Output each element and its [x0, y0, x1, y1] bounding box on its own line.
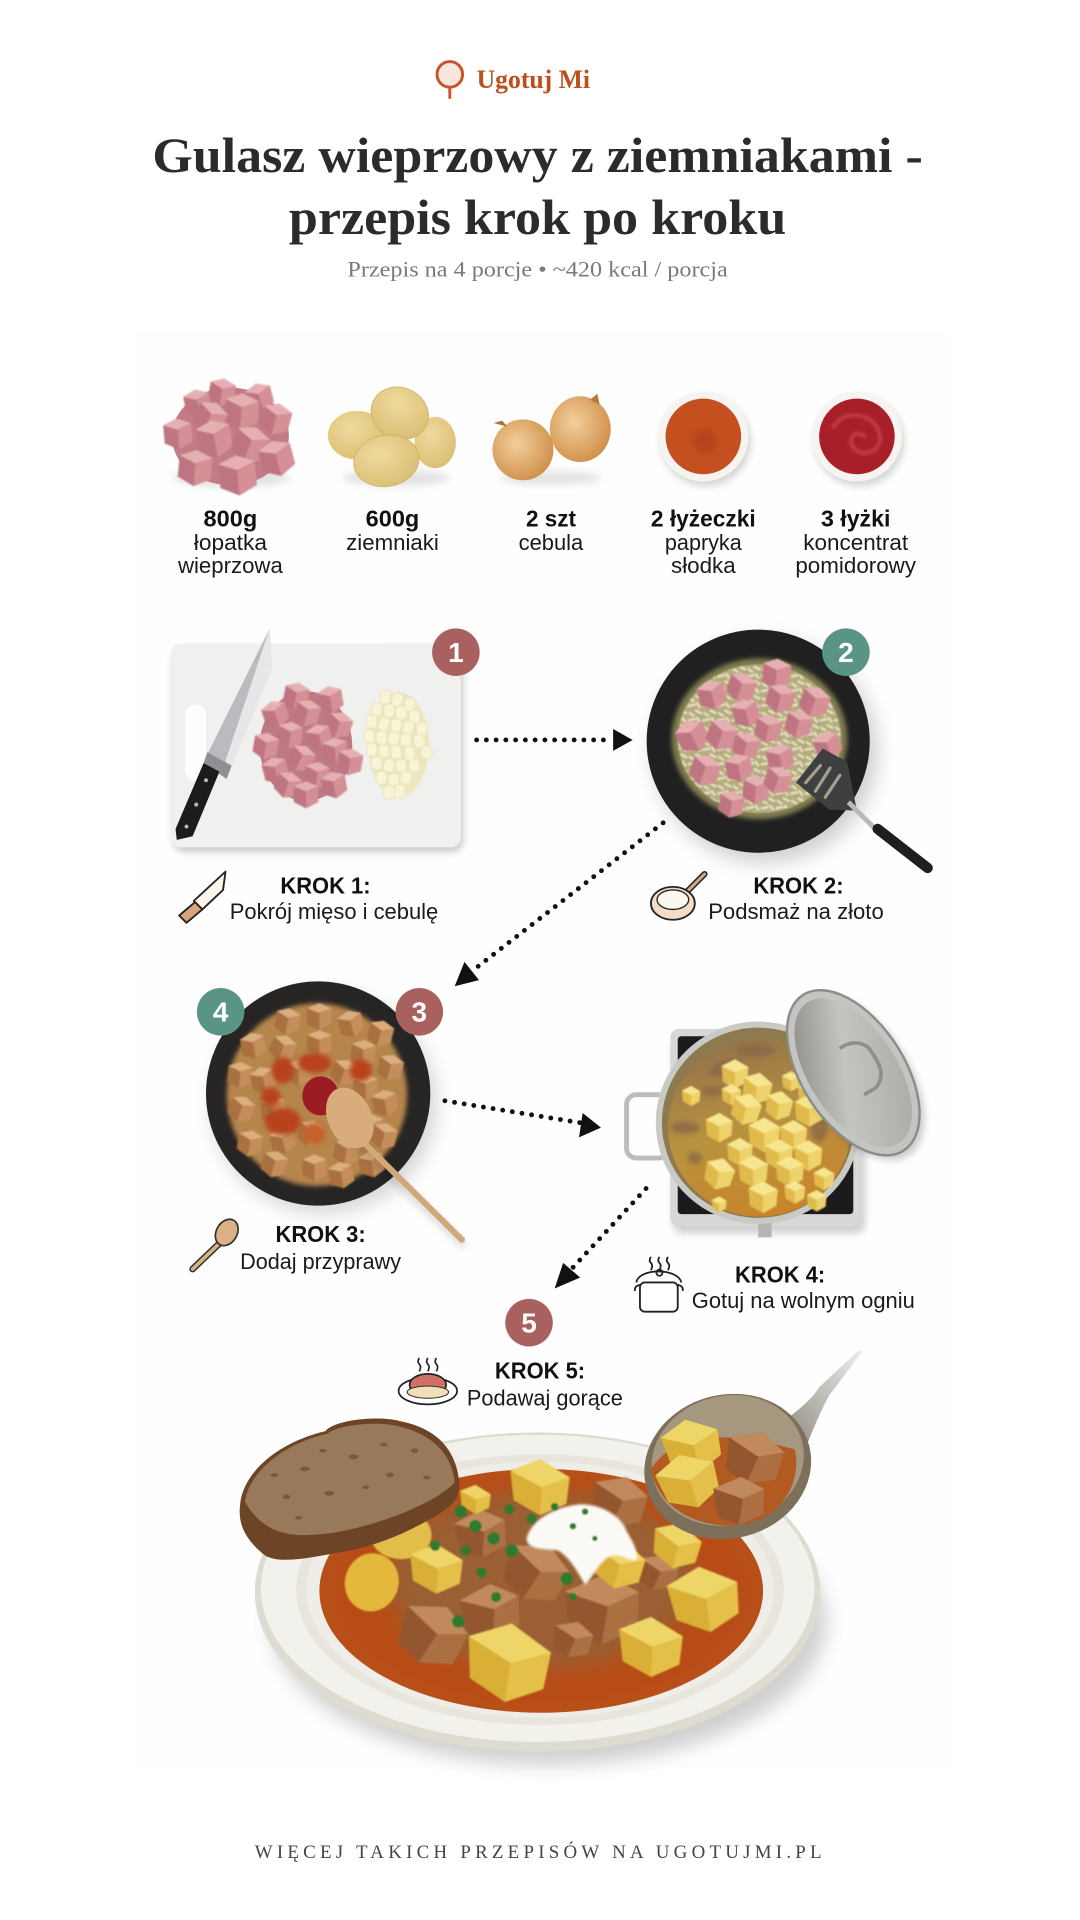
- step label 4: Gotuj na wolnym ogniu: [692, 1288, 915, 1313]
- plate: [255, 1432, 820, 1752]
- step label 2: [708, 873, 884, 924]
- ingredient label: pork: [177, 506, 283, 578]
- title: [152, 127, 923, 245]
- icon: steaming pot: [635, 1257, 683, 1312]
- subtitle: Przepis na 4 porcje • ~420 kcal / porcja: [347, 257, 728, 282]
- ingredient label: tomato paste: [795, 506, 917, 578]
- ingredient: paprika bowl: [658, 391, 751, 486]
- step badge 3: [396, 988, 443, 1036]
- step label 3: KROK 3:: [275, 1221, 366, 1247]
- potato cubes in pot: [682, 1059, 834, 1213]
- ingredient label: onion: [519, 506, 584, 555]
- diced pork: [251, 681, 364, 808]
- serving ladle: [629, 1351, 863, 1557]
- icon: pan: [651, 874, 705, 920]
- step 5: serving: [240, 1299, 863, 1765]
- ingredient label: paprika: papryka: [665, 530, 742, 555]
- icon: spoon: [193, 1215, 243, 1269]
- ingredient label: paprika: słodka: [671, 553, 736, 578]
- ingredient label: potatoes: [346, 506, 439, 555]
- ingredient label: pork: wieprzowa: [177, 553, 283, 578]
- ingredient label: paprika: [651, 506, 756, 578]
- ingredient: potatoes: [328, 378, 456, 492]
- step badge 5: [505, 1299, 553, 1346]
- ingredient label: tomato paste: pomidorowy: [795, 553, 917, 578]
- plate shadow: [271, 1477, 826, 1765]
- step label 1: KROK 1:: [280, 873, 371, 899]
- ingredient label: potatoes: ziemniaki: [346, 530, 439, 555]
- step label 2: Podsmaż na złoto: [708, 899, 884, 924]
- rye bread slice: [240, 1418, 460, 1560]
- ingredient label: pork: łopatka: [194, 530, 267, 555]
- arrow: step 3 to step 4: [445, 1101, 601, 1137]
- step badge 4: 4: [213, 997, 229, 1028]
- step badge 2: [822, 628, 870, 676]
- pot lid: [760, 967, 952, 1183]
- step 4: pot on stove: [627, 967, 952, 1313]
- ingredient label: onion: cebula: [519, 530, 584, 555]
- frying pan: [647, 630, 870, 853]
- step badge 4: [197, 988, 244, 1036]
- icon: plated dish: [399, 1358, 457, 1404]
- frying pan: [206, 981, 430, 1206]
- step label 1: Pokrój mięso i cebulę: [230, 899, 438, 924]
- stew potatoes: [338, 1459, 745, 1706]
- panel: ingredients: [163, 376, 917, 578]
- ingredient label: pork: 800g: [204, 506, 257, 532]
- browned pork: [225, 1003, 405, 1190]
- icon: knife: [179, 872, 226, 923]
- step label 3: [240, 1221, 402, 1274]
- logo wordmark: Ugotuj Mi: [477, 64, 591, 94]
- pork in pan: [672, 658, 845, 820]
- logo: [437, 62, 591, 98]
- step 3: pan with spices: [193, 981, 464, 1274]
- step label 1: [230, 873, 438, 924]
- ingredient: pork cubes: [163, 376, 297, 497]
- step 1: cutting board: [171, 628, 480, 924]
- step badge 1: 1: [448, 637, 464, 668]
- step badge 5: 5: [521, 1307, 537, 1338]
- step label 3: Dodaj przyprawy: [240, 1249, 402, 1274]
- cutting board: [171, 644, 463, 852]
- step label 2: KROK 2:: [753, 873, 844, 899]
- stove: [670, 1029, 865, 1237]
- step label 5: Podawaj gorące: [467, 1386, 623, 1411]
- ingredient label: potatoes: 600g: [366, 506, 419, 532]
- pot: [656, 1022, 861, 1224]
- icon: logo spoon: [437, 62, 463, 98]
- pan shadow: [212, 994, 436, 1213]
- chef knife: [176, 629, 272, 840]
- ingredient label: tomato paste: 3 łyżki: [821, 506, 890, 532]
- step badge 3: 3: [412, 997, 427, 1028]
- ingredient: tomato paste bowl: [812, 391, 904, 486]
- wooden spoon: [317, 1080, 464, 1246]
- arrow: step 4 to step 5: [555, 1189, 646, 1289]
- paprika spice patches: [261, 1053, 372, 1145]
- stew: [319, 1469, 763, 1713]
- step 2: frying pan: [647, 628, 928, 924]
- pot handle: [627, 1095, 668, 1158]
- stew meat: [391, 1472, 681, 1675]
- diced onion: [363, 691, 432, 799]
- parsley: [430, 1503, 597, 1627]
- ingredient label: onion: 2 szt: [526, 506, 576, 532]
- title: Gulasz wieprzowy z ziemniakami -: [152, 127, 923, 183]
- step badge 1: [432, 628, 480, 676]
- tomato paste dollop: [302, 1076, 339, 1115]
- ingredient label: paprika: 2 łyżeczki: [651, 506, 756, 532]
- title: przepis krok po kroku: [289, 189, 786, 245]
- step badge 2: 2: [838, 637, 854, 668]
- arrow: step 2 to step 3: [455, 823, 663, 986]
- step label 4: [692, 1261, 915, 1313]
- ingredient label: tomato paste: koncentrat: [803, 530, 909, 555]
- step label 5: KROK 5:: [495, 1358, 585, 1384]
- footer: WIĘCEJ TAKICH PRZEPISÓW NA UGOTUJMI.PL: [255, 1841, 822, 1863]
- pan shadow: [653, 639, 878, 863]
- stewing meat: [670, 1045, 828, 1164]
- spatula: [796, 748, 928, 868]
- step label 5: [467, 1358, 623, 1411]
- sour cream: [527, 1504, 637, 1585]
- arrow: step 1 to step 2: [477, 729, 633, 751]
- step label 4: KROK 4:: [735, 1261, 825, 1287]
- ingredient: onions: [492, 394, 611, 485]
